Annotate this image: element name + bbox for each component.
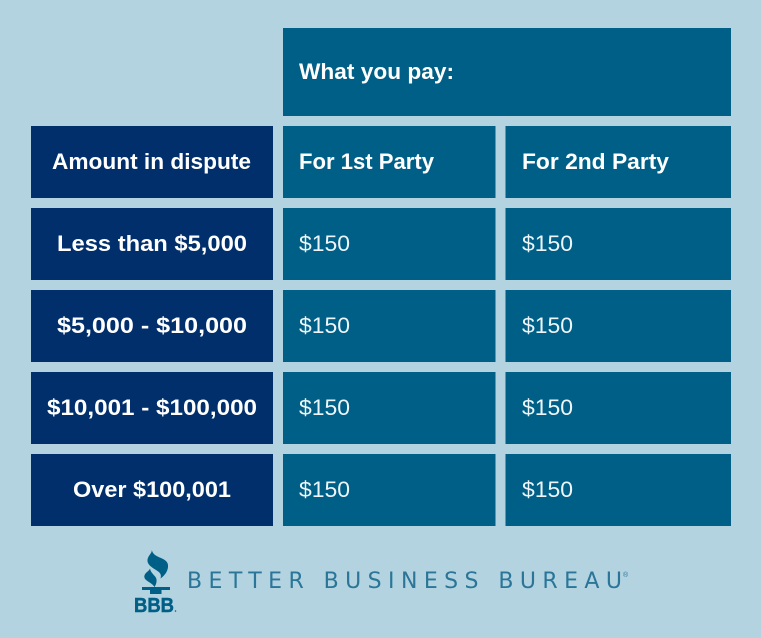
fee: row 2, 1st party: $150 — [299, 313, 350, 338]
row label: $5,000 - $10,000: $5,000 - $10,000 — [57, 313, 247, 338]
fee: row 1, 1st party — [283, 208, 496, 280]
column header: for 1st party — [283, 126, 496, 198]
fee: row 1, 1st party: $150 — [299, 231, 350, 256]
column header: for 1st party: For 1st Party — [299, 149, 435, 174]
row label: less than $5,000 — [31, 208, 273, 280]
row label: $5,000 - $10,000 — [31, 290, 273, 362]
logo wordmark: BETTER BUSINESS BUREAU — [187, 569, 622, 594]
fee: row 3, 1st party — [283, 372, 496, 444]
fee: row 4, 1st party: $150 — [299, 477, 350, 502]
fee: row 1, 2nd party: $150 — [522, 231, 573, 256]
fee: row 2, 1st party — [283, 290, 496, 362]
header: what you pay: What you pay: — [299, 59, 454, 84]
row label: $10,001 - $100,000 — [31, 372, 273, 444]
icon: BBB torch logo — [134, 549, 176, 617]
row label: less than $5,000: Less than $5,000 — [57, 231, 247, 256]
row label: $10,001 - $100,000: $10,001 - $100,000 — [47, 395, 257, 420]
icon: BBB torch logo: BBB — [134, 595, 174, 617]
header: what you pay — [283, 28, 731, 116]
column header: for 2nd party — [506, 126, 731, 198]
fee: row 2, 2nd party — [506, 290, 731, 362]
fee: row 4, 2nd party — [506, 454, 731, 526]
row label: over $100,001: Over $100,001 — [73, 477, 231, 502]
row label: over $100,001 — [31, 454, 273, 526]
fee: row 3, 2nd party: $150 — [522, 395, 573, 420]
logo wordmark: ® — [623, 571, 629, 579]
fee: row 2, 2nd party: $150 — [522, 313, 573, 338]
fee: row 1, 2nd party — [506, 208, 731, 280]
fee: row 3, 1st party: $150 — [299, 395, 350, 420]
column header: amount in dispute: Amount in dispute — [52, 149, 251, 174]
column header: for 2nd party: For 2nd Party — [522, 149, 670, 174]
fee: row 4, 1st party — [283, 454, 496, 526]
column header: amount in dispute — [31, 126, 273, 198]
fee: row 4, 2nd party: $150 — [522, 477, 573, 502]
fee: row 3, 2nd party — [506, 372, 731, 444]
